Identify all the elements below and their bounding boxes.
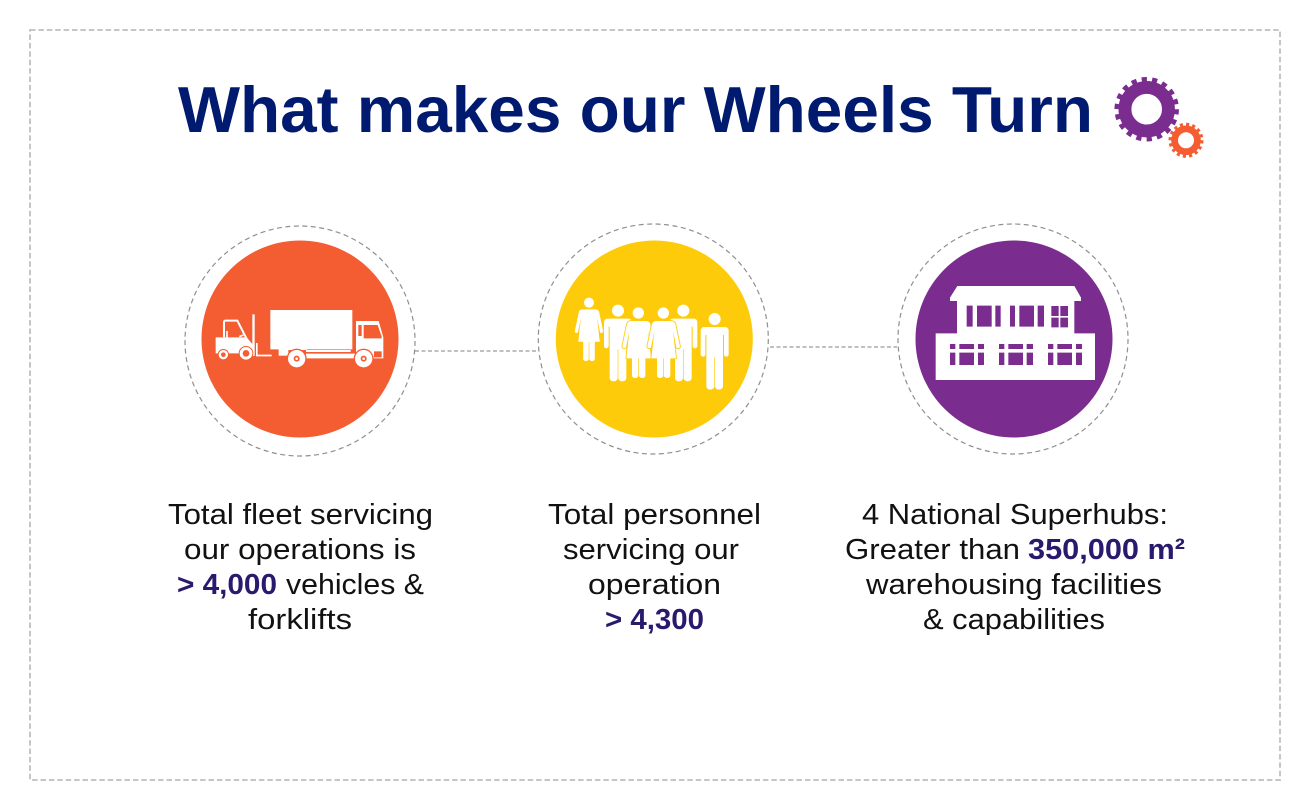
icon: forklift and truck: [216, 310, 383, 369]
text block: personnel: operation: [588, 569, 721, 601]
text block: superhubs: 350,000 m²: [1028, 534, 1185, 566]
text block: personnel: > 4,300: [605, 604, 704, 636]
text block: fleet: vehicles &: [286, 569, 424, 601]
text block: fleet: Total fleet servicing: [168, 499, 433, 531]
text block: personnel: Total personnel: [548, 499, 761, 531]
panel: superhubs circle: [898, 224, 1128, 454]
text block: fleet: our operations is: [184, 534, 416, 566]
panel: personnel circle: [538, 224, 768, 454]
text block: personnel: servicing our: [563, 534, 739, 566]
panel: fleet circle: [185, 226, 415, 456]
text block: superhubs: & capabilities: [923, 604, 1105, 636]
icon: warehouse building: [936, 286, 1095, 380]
connector: fleet to personnel: [415, 350, 538, 352]
text block: fleet: forklifts: [248, 604, 352, 636]
connector: personnel to superhubs: [770, 346, 897, 348]
text block: personnel: [548, 499, 761, 636]
text block: superhubs: 4 National Superhubs:: [862, 499, 1168, 531]
text block: superhubs: warehousing facilities: [865, 569, 1162, 601]
title: What makes our Wheels Turn: [178, 73, 1093, 146]
text block: superhubs: Greater than: [845, 534, 1020, 566]
icon: group of people: [575, 298, 729, 390]
icon: gears: [1117, 79, 1202, 156]
text block: fleet: [168, 499, 433, 636]
text block: superhubs: [845, 499, 1185, 636]
text block: fleet: > 4,000: [177, 569, 277, 601]
